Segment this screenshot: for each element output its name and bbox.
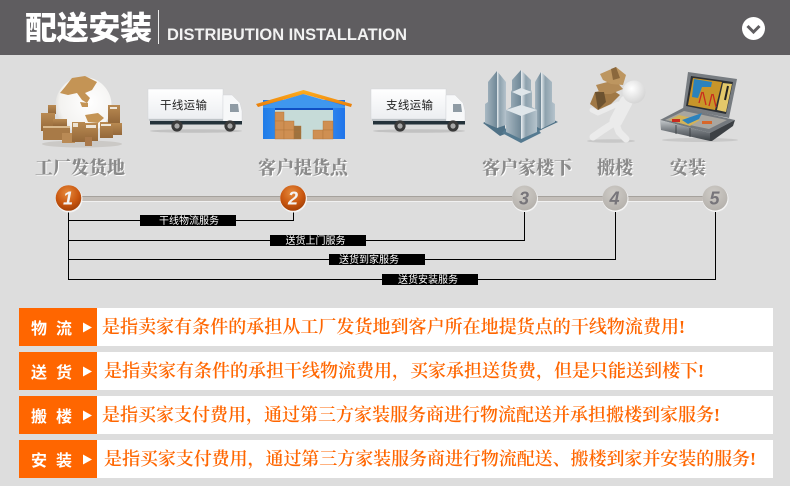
icon: office towers <box>483 70 558 143</box>
toolbox lid <box>683 72 737 118</box>
step 1 <box>56 185 82 212</box>
tag: door delivery service <box>270 234 366 247</box>
step 5: 5 <box>709 188 720 208</box>
toolbox base <box>660 108 735 141</box>
row: installation <box>19 440 773 478</box>
tag: trunk logistics service: 干线物流服务 <box>159 214 219 227</box>
tag: home delivery service: 送货到家服务 <box>339 253 399 266</box>
step 3 <box>512 186 538 212</box>
icon: person carrying boxes <box>587 67 646 143</box>
carried boxes <box>590 67 626 110</box>
title: 配送安装 <box>25 10 152 46</box>
row: carry upstairs: 是指买家支付费用，通过第三方家装服务商进行物流配送并承担搬楼到家服务! <box>102 405 720 426</box>
icon: toolbox <box>660 72 738 142</box>
label: factory: 工厂发货地 <box>35 157 125 178</box>
centre tower <box>502 70 541 143</box>
tag: trunk logistics service <box>140 214 236 227</box>
row: delivery <box>19 352 773 390</box>
row: carry upstairs <box>19 396 773 434</box>
label: install: 安装 <box>670 157 706 178</box>
icon: truck 2 <box>371 89 465 133</box>
step 2 <box>280 185 307 212</box>
title divider <box>158 10 159 44</box>
tag: home delivery service <box>329 253 425 266</box>
icon: warehouse <box>256 90 352 139</box>
figure body <box>592 102 626 139</box>
row: logistics: 物 流 <box>31 319 72 338</box>
progress rail <box>70 196 715 202</box>
step 3: 3 <box>519 188 529 208</box>
figure head <box>622 80 646 104</box>
tag: delivery and install service: 送货安装服务 <box>398 273 458 286</box>
label: carry upstairs: 搬楼 <box>597 157 635 178</box>
row: logistics: 是指卖家有条件的承担从工厂发货地到客户所在地提货点的干线物流费用! <box>102 316 685 337</box>
header band <box>0 0 790 55</box>
icon: truck 1 <box>148 89 242 133</box>
truck label: 支线运输 <box>386 98 434 112</box>
tag: door delivery service: 送货上门服务 <box>286 234 346 247</box>
english subtitle: DISTRIBUTION INSTALLATION <box>167 26 407 44</box>
step 2: 2 <box>287 188 298 208</box>
stage labels <box>35 157 706 178</box>
row: installation: 安 装 <box>31 452 72 470</box>
row: delivery: 送 货 <box>31 363 72 382</box>
row: logistics <box>19 308 773 346</box>
tag: delivery and install service <box>382 273 478 286</box>
icon: globe with boxes <box>41 76 122 148</box>
row: carry upstairs: 搬 楼 <box>31 407 72 426</box>
left tower <box>483 71 506 136</box>
icon: chevron down <box>742 17 765 40</box>
row: installation: 是指买家支付费用，通过第三方家装服务商进行物流配送、搬楼到家并安装的服务! <box>104 449 756 470</box>
right tower <box>535 72 558 132</box>
connector lines <box>68 212 716 280</box>
step 5 <box>702 186 728 212</box>
truck label: 干线运输 <box>160 98 208 112</box>
label: downstairs: 客户家楼下 <box>482 157 573 178</box>
step 4: 4 <box>608 188 620 208</box>
step 4 <box>602 186 628 212</box>
row: delivery: 是指卖家有条件的承担干线物流费用，买家承担送货费，但是只能送到楼下! <box>104 361 704 382</box>
step 1: 1 <box>63 188 73 208</box>
label: pick-up point: 客户提货点 <box>258 157 350 178</box>
